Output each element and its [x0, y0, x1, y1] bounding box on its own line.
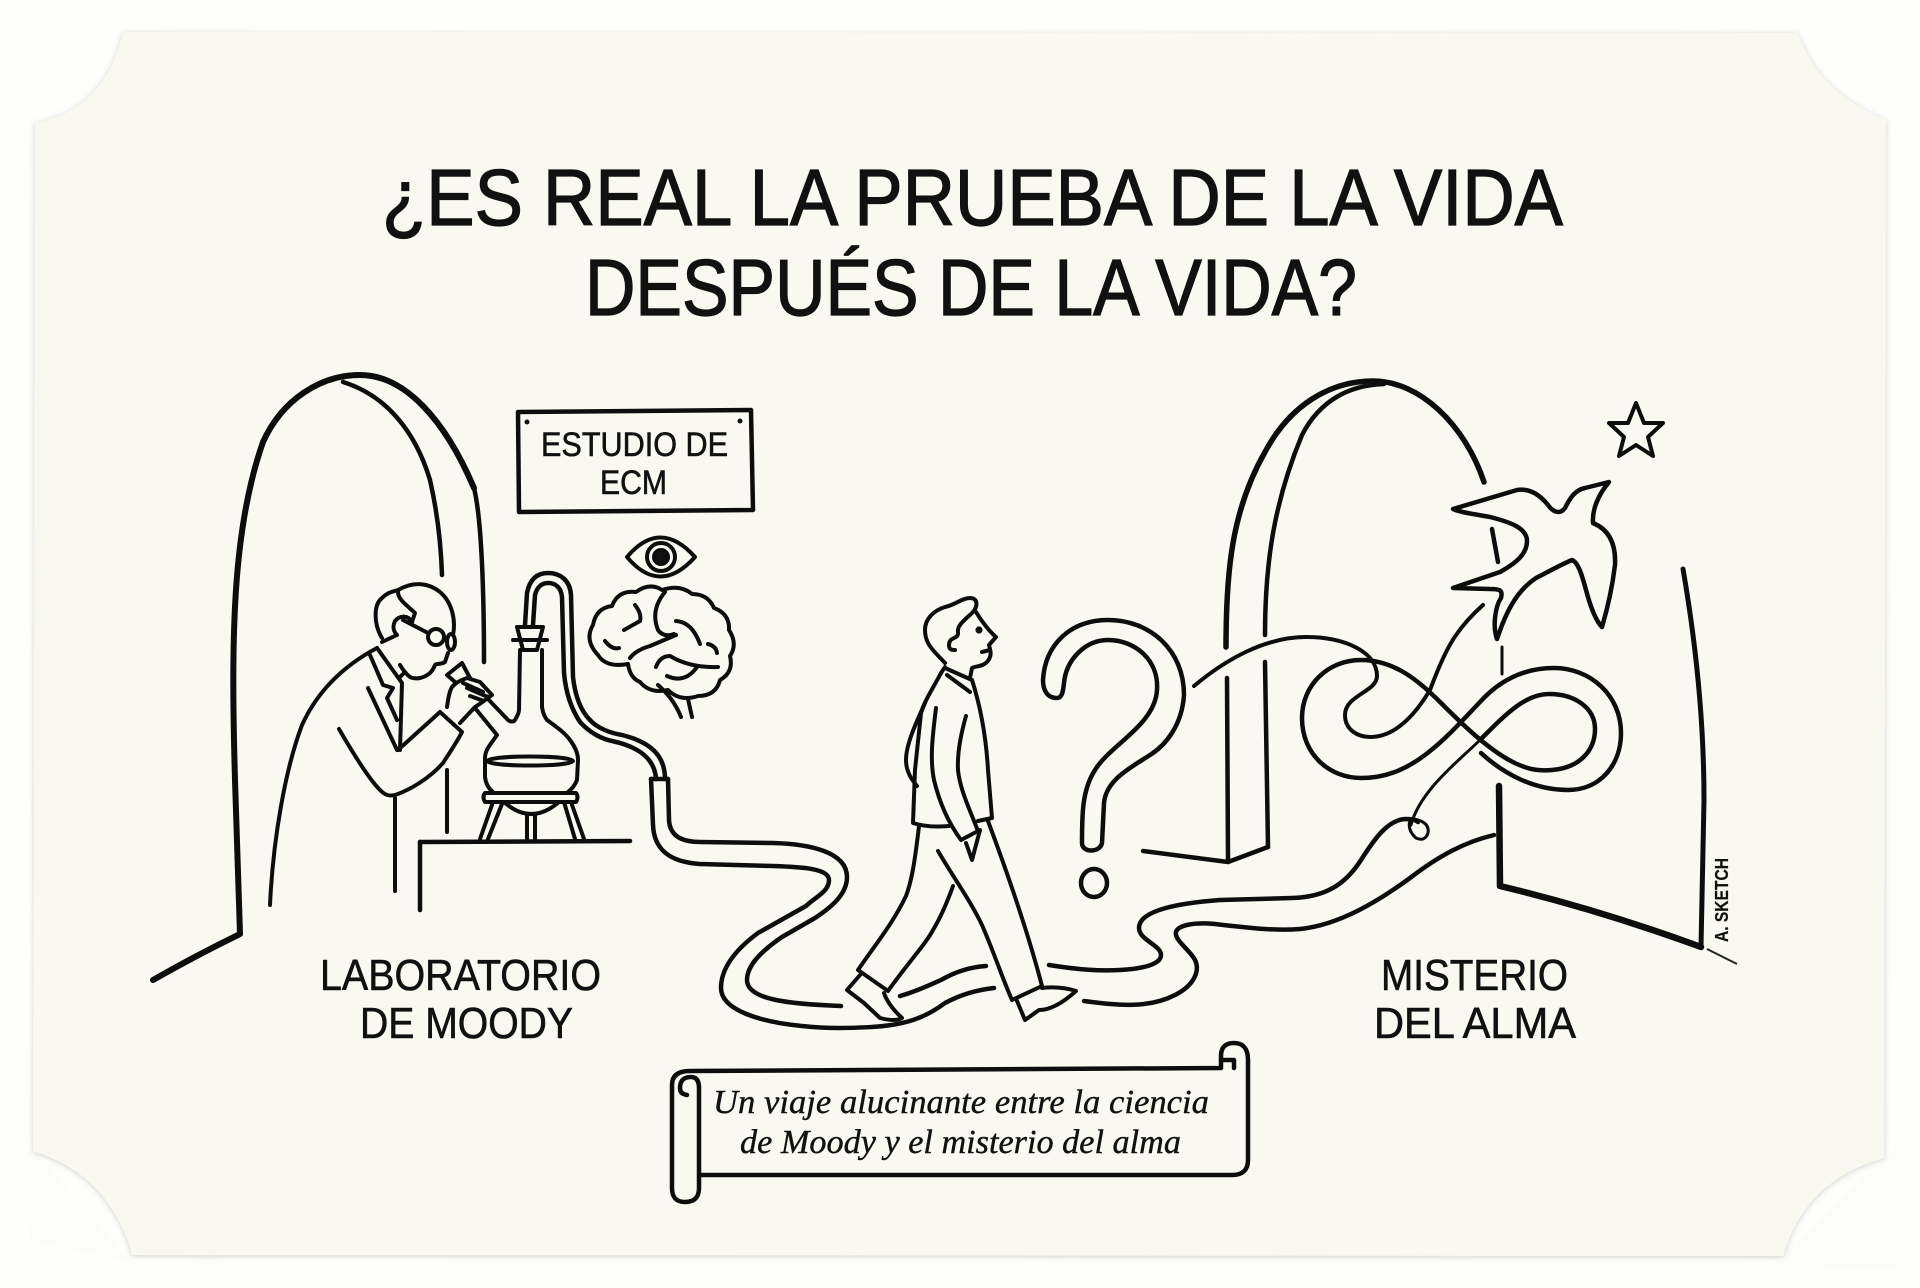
bench: [420, 841, 630, 910]
title: [382, 153, 1564, 332]
banner text: de Moody y el misterio del alma: [740, 1124, 1181, 1161]
question mark: [1043, 620, 1184, 897]
icon: bird: [1453, 482, 1615, 639]
sign: estudio de ECM: ESTUDIO DE: [541, 426, 728, 464]
title: DESPUÉS DE LA VIDA?: [585, 243, 1357, 332]
title: ¿ES REAL LA PRUEBA DE LA VIDA: [382, 153, 1564, 242]
label: misterio del alma: [1374, 951, 1577, 1048]
sign: estudio de ECM: ECM: [600, 464, 667, 502]
label: laboratorio de Moody: [320, 951, 601, 1048]
infinity and swirl: [1194, 605, 1621, 839]
sign: estudio de ECM: [518, 410, 753, 512]
banner text: [713, 1084, 1209, 1161]
flask on stand: [475, 627, 584, 839]
banner scroll: [672, 1043, 1248, 1202]
label: misterio del alma: MISTERIO: [1381, 951, 1568, 1000]
right archway: mystery: [1143, 381, 1704, 947]
label: laboratorio de Moody: LABORATORIO: [320, 951, 601, 1000]
label: misterio del alma: DEL ALMA: [1374, 999, 1577, 1048]
banner text: Un viaje alucinante entre la ciencia: [713, 1084, 1209, 1121]
signature: [1707, 858, 1737, 964]
left archway: laboratory: [153, 375, 484, 980]
icon: eye: [627, 538, 695, 576]
winding path: [651, 779, 1494, 1028]
walking man: [847, 598, 1076, 1020]
label: laboratorio de Moody: DE MOODY: [360, 999, 573, 1048]
icon: star: [1609, 403, 1663, 456]
tube from flask to winding path: [525, 573, 668, 779]
signature: A. SKETCH: [1712, 858, 1732, 942]
scientist: [270, 584, 492, 905]
icon: brain: [589, 586, 734, 717]
